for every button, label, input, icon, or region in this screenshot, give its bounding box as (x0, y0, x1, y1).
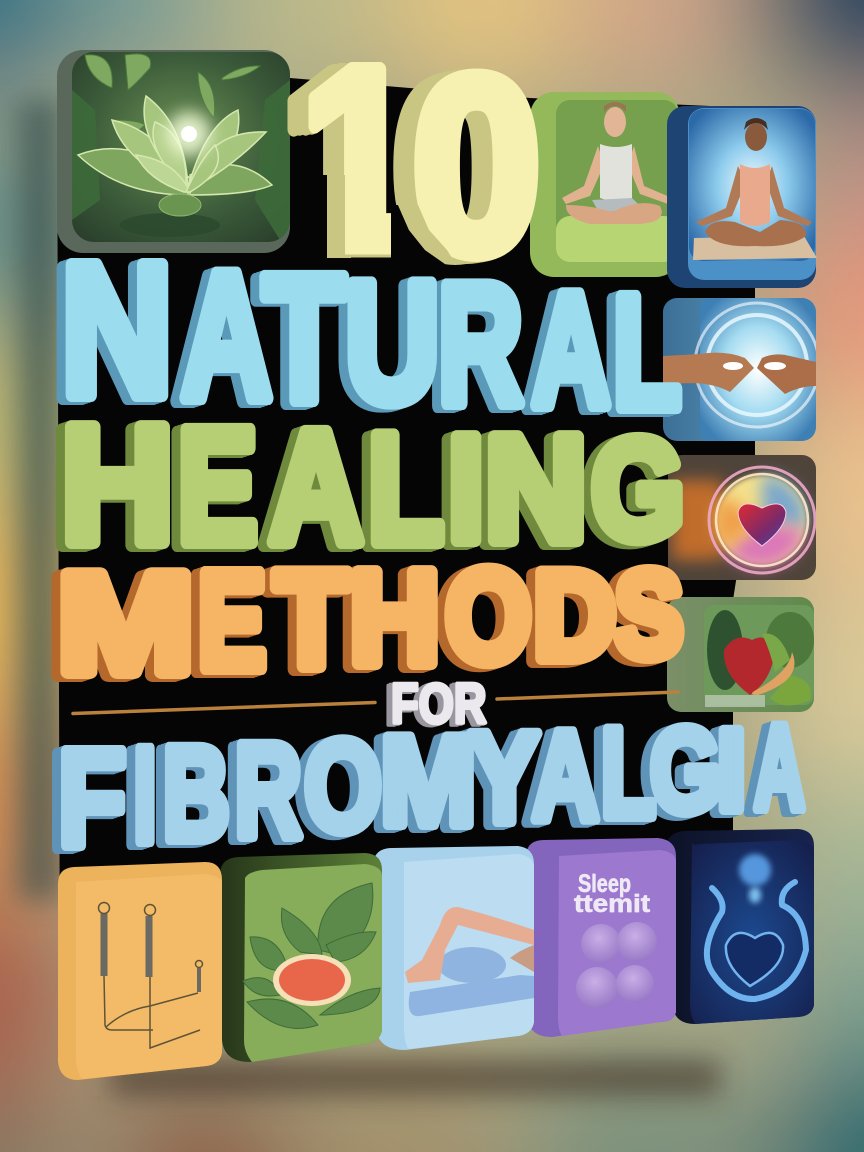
heading: 10 (288, 62, 538, 265)
heading: HEALING: E (178, 394, 258, 577)
heading: METHODS: T (275, 543, 349, 695)
tile: sleep treatment (526, 838, 676, 1037)
divider lines (73, 692, 678, 714)
heading: FIBROMYALGIA: I (133, 718, 157, 870)
heading: HEALING: I (448, 405, 484, 572)
label: sleep text: ttemit (574, 890, 651, 918)
black backing panel (57, 76, 755, 1000)
heading: METHODS: O (446, 542, 531, 689)
heading: HEALING: H (61, 392, 174, 578)
tile: meditation on blue (667, 106, 817, 288)
tile: glowing blue heart (665, 829, 814, 1024)
heading: FIBROMYALGIA: F (58, 722, 126, 876)
heading: FIBROMYALGIA: A (754, 702, 805, 834)
heading: FIBROMYALGIA: B (162, 720, 230, 868)
label: sleep text: Sleep (578, 870, 631, 898)
heading: NATURAL: A (532, 260, 610, 440)
heading: NATURAL: U (345, 247, 440, 438)
heading: METHODS: D (534, 547, 616, 685)
heading: FIBROMYALGIA: O (304, 712, 382, 858)
heading: HEALING: A (269, 397, 363, 576)
heading: FIBROMYALGIA: Y (469, 706, 540, 850)
heading: NATURAL: A (181, 235, 272, 437)
heading: FIBROMYALGIA: G (650, 704, 721, 838)
heading: FIBROMYALGIA: R (234, 716, 302, 866)
tile: rainbow heart (668, 455, 816, 580)
heading: NATURAL: T (263, 238, 346, 438)
cast shadows on wall (18, 100, 720, 1096)
heading: METHODS: E (198, 544, 266, 698)
heading: NATURAL: R (438, 249, 523, 440)
tile: healthy food (667, 597, 814, 712)
heading: FIBROMYALGIA: L (601, 702, 656, 844)
tile: seated meditation on green (530, 92, 680, 277)
heading: HEALING: L (368, 402, 444, 575)
heading: FIBROMYALGIA: I (716, 706, 746, 834)
purple capsules (576, 922, 657, 1009)
heading: FIBROMYALGIA: M (380, 710, 477, 852)
tile: acupuncture needles (58, 862, 222, 1080)
heading: 10: 0 (412, 25, 541, 306)
heading: HEALING: N (485, 405, 587, 572)
tile: grapefruit and leaves (220, 853, 382, 1062)
heading: FOR: FOR (391, 672, 487, 736)
tile: resting leg on pillow (373, 846, 534, 1050)
heading: METHODS: H (350, 544, 440, 691)
tile: energy hands (663, 298, 819, 441)
heading: NATURAL: N (61, 225, 173, 436)
heading: FIBROMYALGIA: A (532, 704, 599, 846)
heading: METHODS: M (58, 544, 194, 703)
heading: NATURAL: L (613, 262, 681, 441)
heading: METHODS: S (615, 546, 683, 682)
tile: healing plant (57, 50, 290, 253)
heading: 10: 1 (300, 13, 420, 302)
heading: HEALING: G (592, 410, 684, 569)
